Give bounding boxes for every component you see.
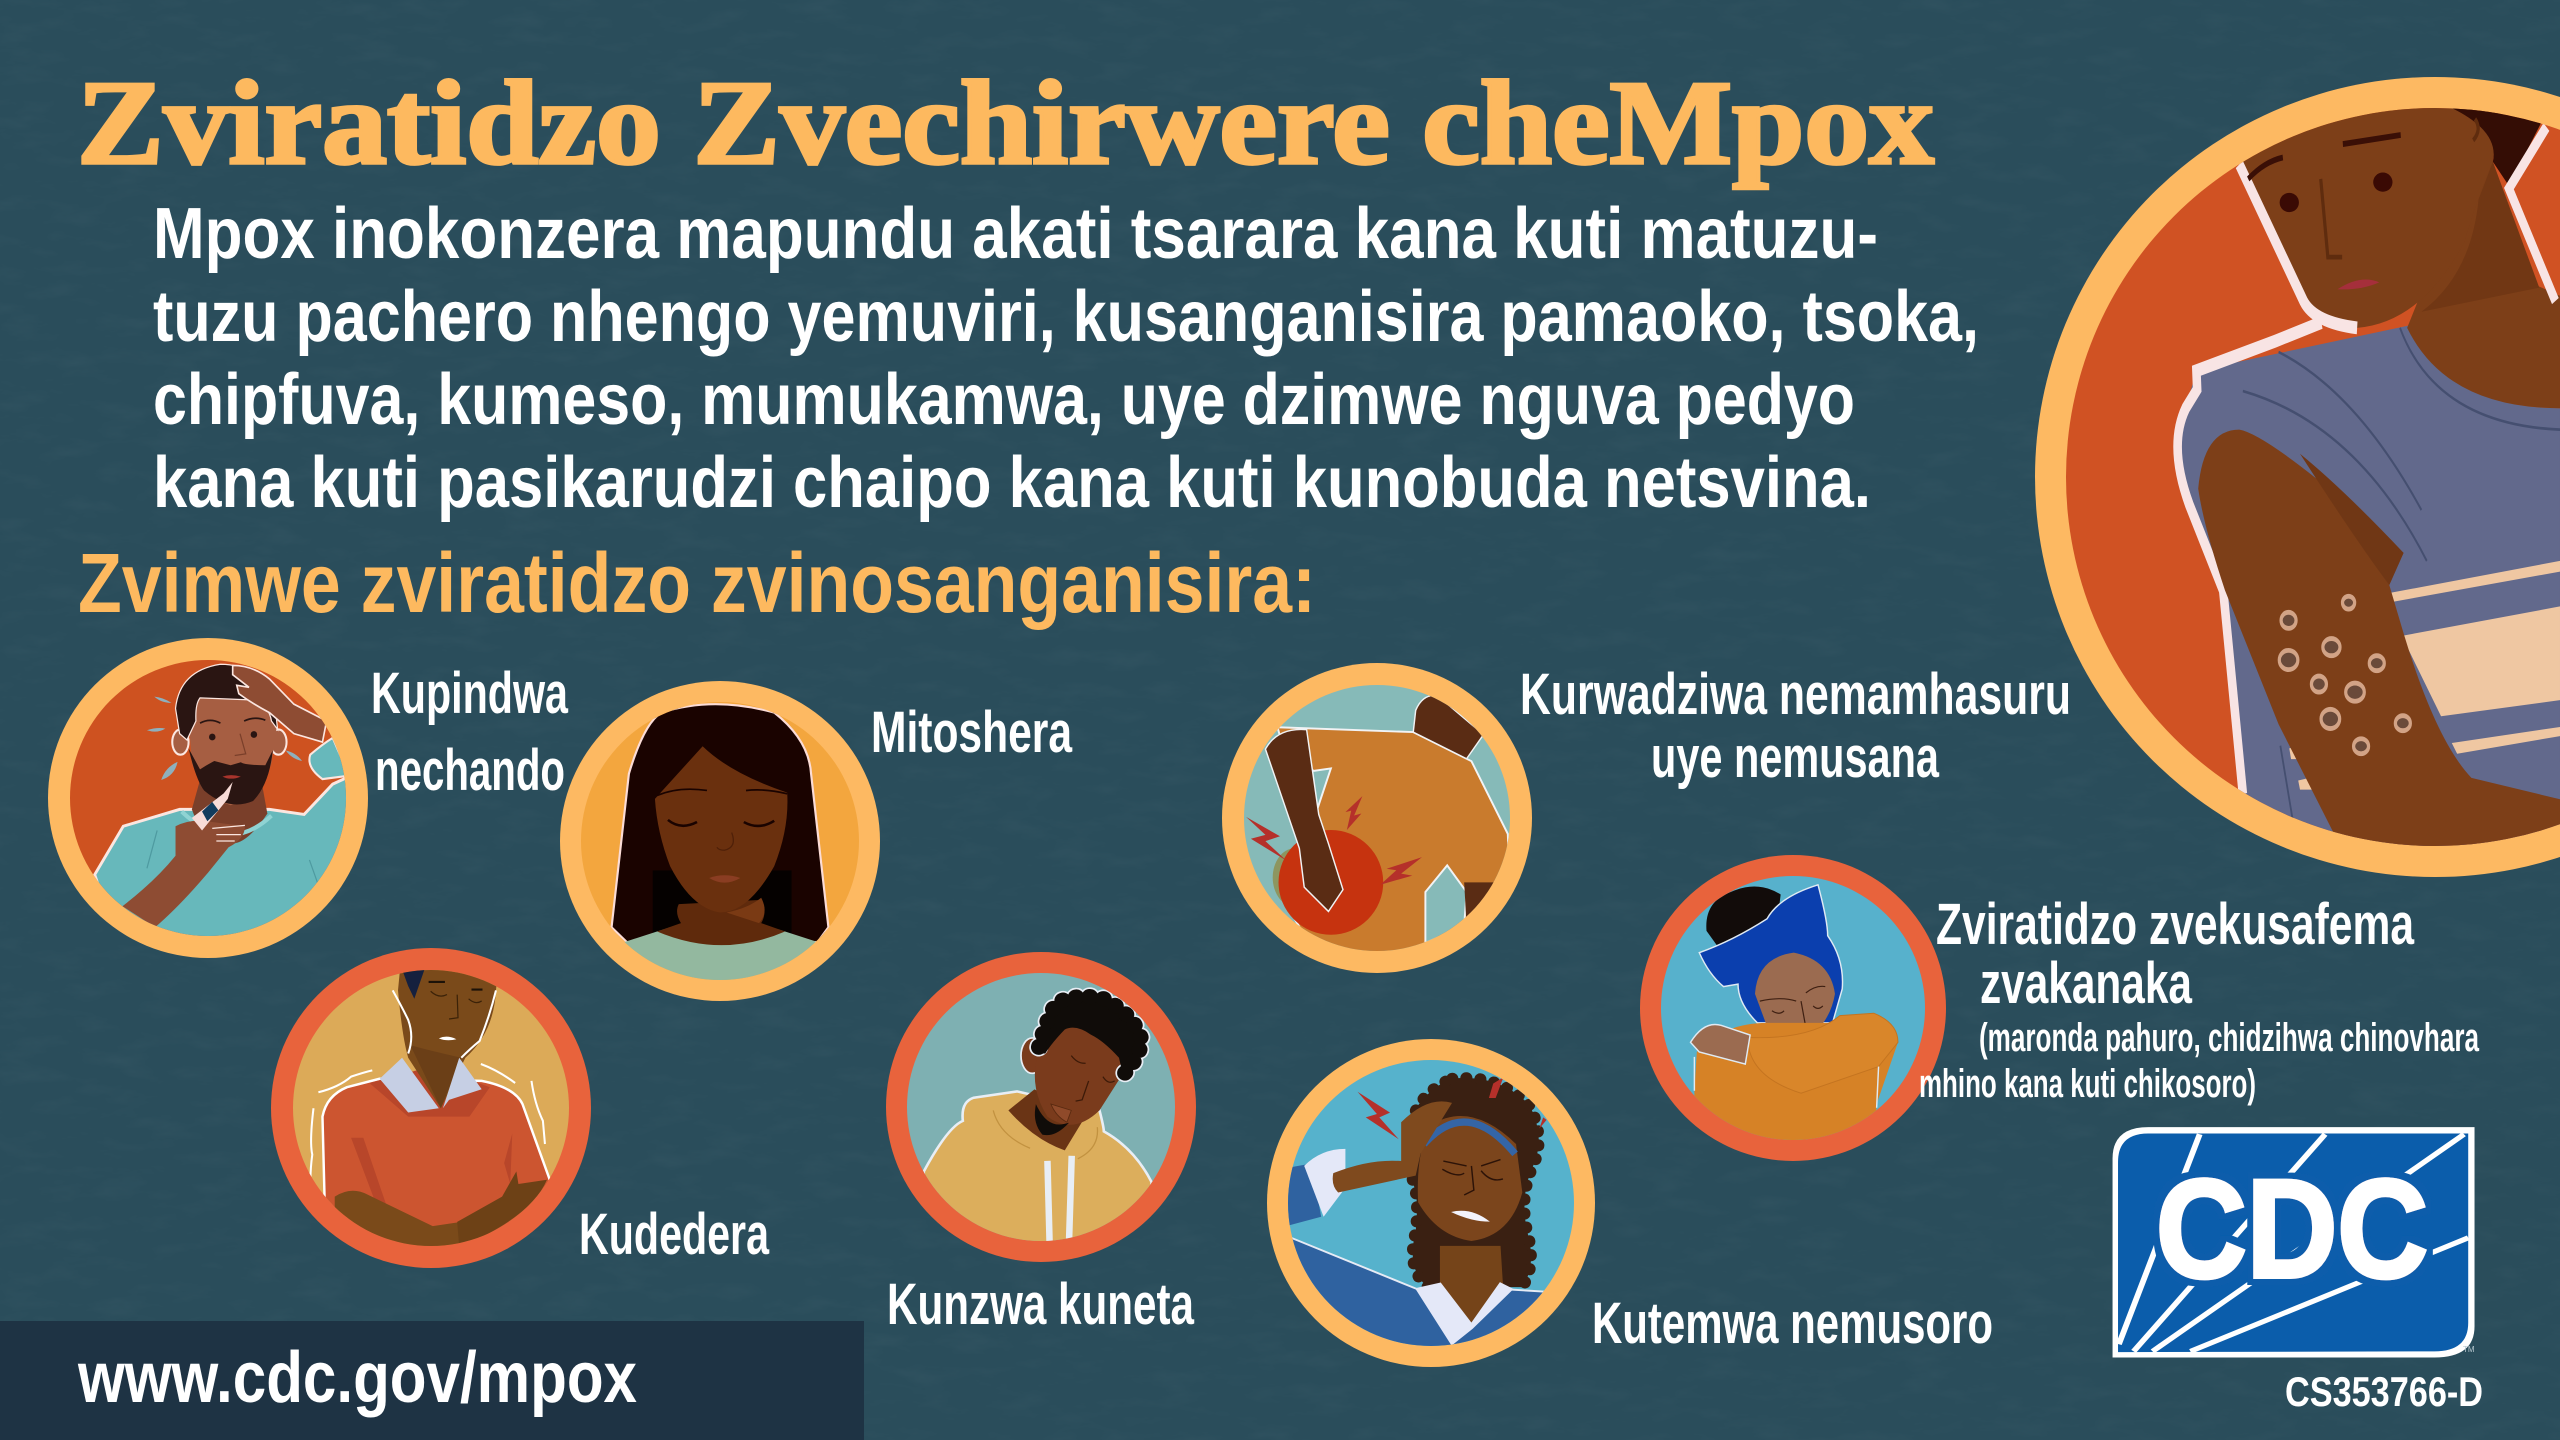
label: respiratory symptoms: zvakanaka (1980, 951, 2193, 1016)
CDC logo (2113, 1127, 2475, 1357)
intro paragraph (153, 194, 1979, 523)
symptom icon: muscle aches and backache (1222, 663, 1532, 973)
symptom icon: exhaustion (886, 952, 1196, 1262)
footer bar with URL (0, 1321, 864, 1440)
label: fever and sweats (371, 661, 569, 803)
intro paragraph: Mpox inokonzera mapundu akati tsarara kana kuti matuzu- (153, 194, 1878, 274)
document code: CS353766-D (2285, 1368, 2483, 1415)
CDC logo: CDC (2156, 1150, 2428, 1307)
symptom icon: respiratory symptoms (1640, 855, 1946, 1161)
label: fever and sweats: nechando (375, 738, 565, 803)
label: muscle aches and backache: uye nemusana (1651, 725, 1940, 790)
symptom icon: fever and sweats (48, 638, 368, 958)
label: muscle aches and backache: Kurwadziwa nemamhasuru (1520, 662, 2071, 727)
label: respiratory symptoms: mhino kana kuti chikosoro) (1919, 1062, 2256, 1106)
label: respiratory symptoms (1919, 892, 2479, 1106)
CDC logo: TM (2463, 1345, 2475, 1354)
title: Zviratidzo Zvechirwere cheMpox (77, 56, 1934, 189)
label: fever and sweats: Kupindwa (371, 661, 569, 726)
symptom icon: headache (1267, 1039, 1595, 1367)
intro paragraph: tuzu pachero nhengo yemuviri, kusanganisira pamaoko, tsoka, (153, 277, 1979, 357)
intro paragraph: chipfuva, kumeso, mumukamwa, uye dzimwe nguva pedyo (153, 360, 1855, 440)
label: chills: Kudedera (579, 1202, 770, 1267)
hero illustration: arm with rash (2035, 77, 2560, 877)
label: muscle aches and backache (1520, 662, 2071, 790)
symptom icon: chills (271, 948, 591, 1268)
subheading: Zvimwe zviratidzo zvinosanganisira: (78, 536, 1316, 630)
symptom icon: swollen lymph nodes (560, 681, 880, 1001)
label: swollen lymph nodes: Mitoshera (871, 700, 1073, 765)
intro paragraph: kana kuti pasikarudzi chaipo kana kuti kunobuda netsvina. (153, 443, 1871, 523)
footer bar with URL: www.cdc.gov/mpox (77, 1338, 637, 1418)
label: exhaustion: Kunzwa kuneta (887, 1272, 1195, 1337)
label: headache: Kutemwa nemusoro (1592, 1291, 1993, 1356)
